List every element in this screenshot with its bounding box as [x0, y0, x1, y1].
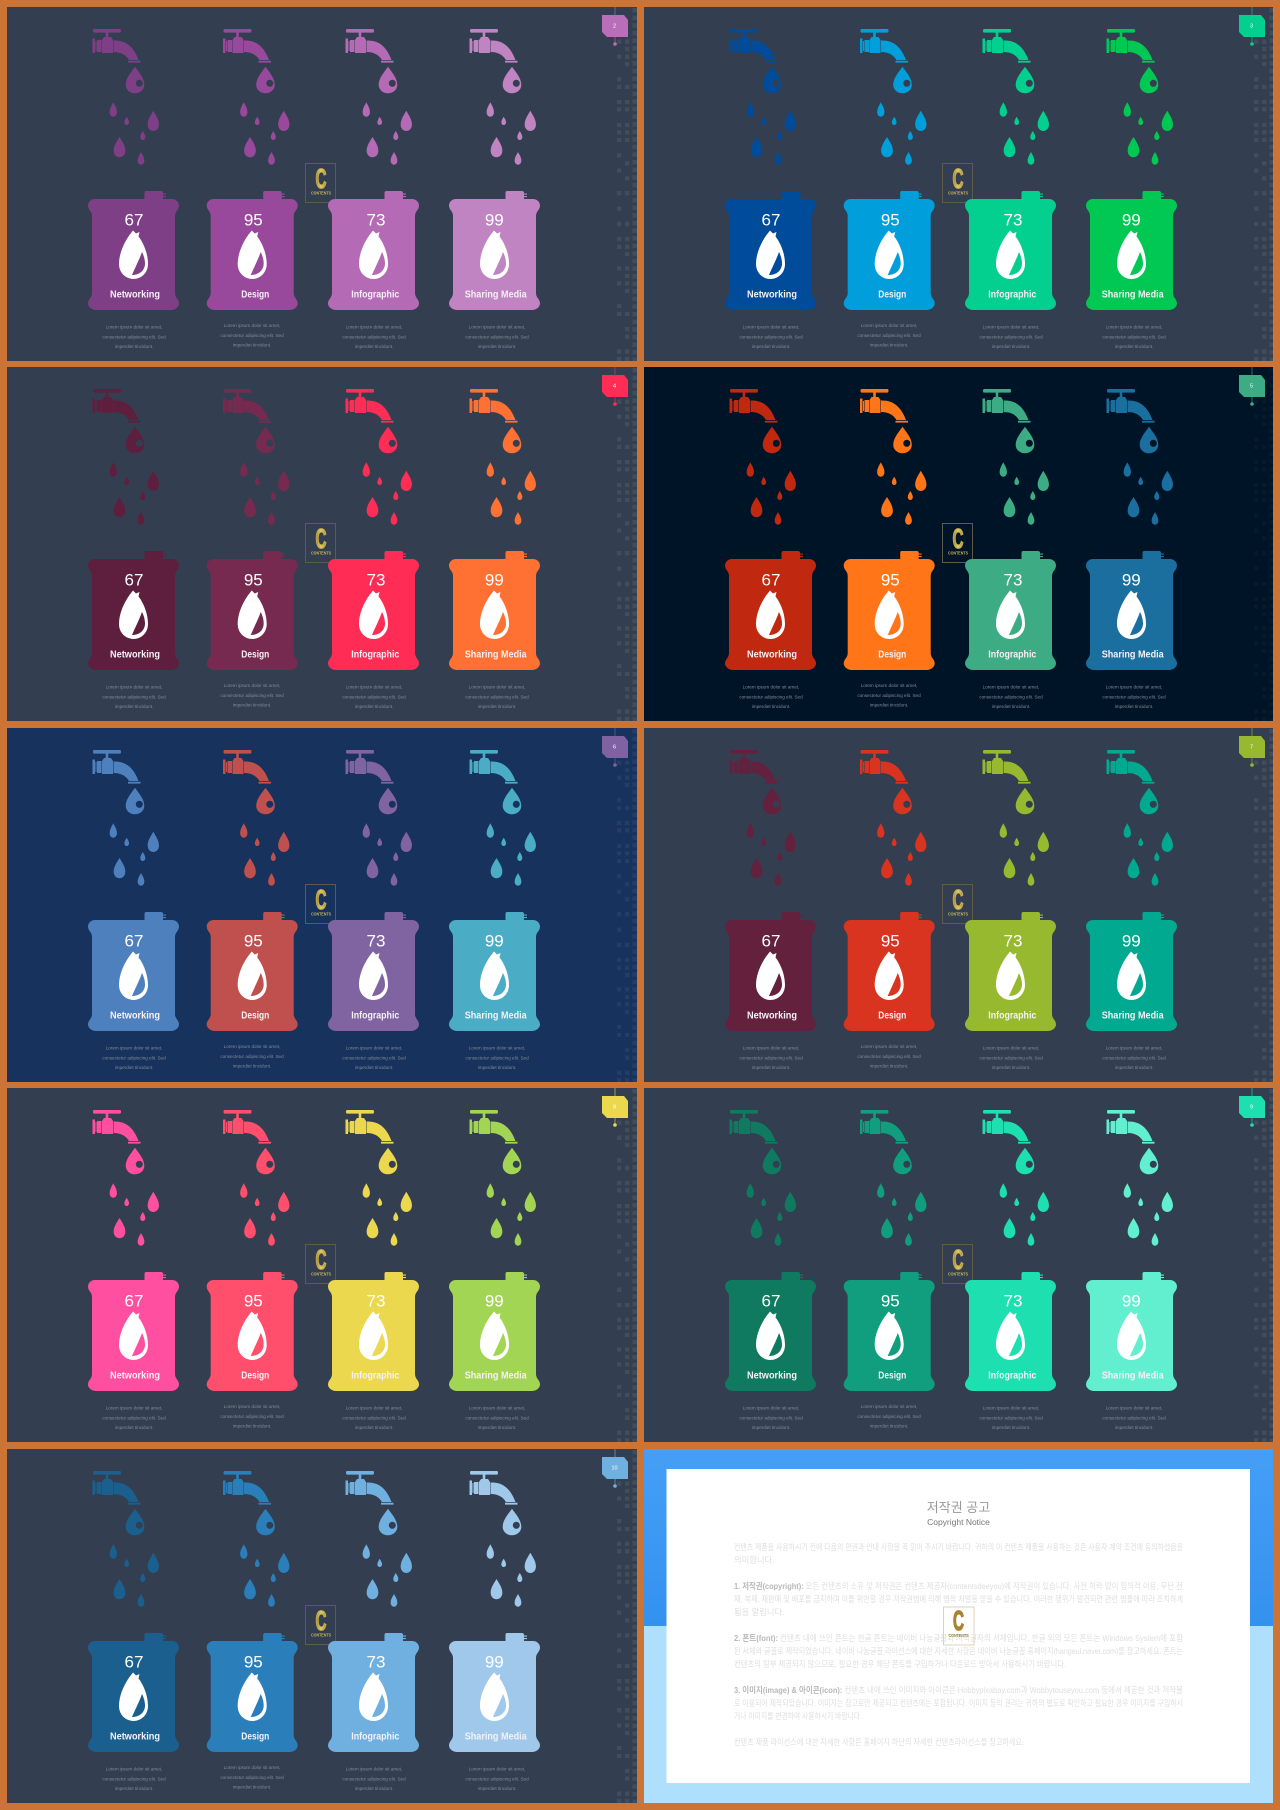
logo: CONTENTS [311, 190, 331, 196]
column: Design: Lorem ipsum dolor sit amet, [224, 683, 280, 688]
column: Sharing Media: Sharing Media [465, 1731, 527, 1743]
column: Sharing Media: Sharing Media [1102, 649, 1164, 661]
column: Design: imperdiet tincidunt. [233, 702, 271, 708]
page tag 7 [1239, 728, 1265, 767]
column: Design: consectetur adipiscing elit. Sed [857, 693, 921, 698]
column: Infographic: Lorem ipsum dolor sit amet, [346, 324, 402, 329]
column: Networking: consectetur adipiscing elit. Sed [739, 694, 803, 699]
column: Sharing Media: imperdiet tincidunt. [478, 1425, 516, 1430]
panel: copyright notice [644, 1449, 1273, 1803]
notice body text: 컨텐츠의 일부 제공되지 않으므로, 필요한 경우 해당 폰트를 구입하거나 다운로드 받아서 사용하시기 바랍니다. [734, 1659, 1066, 1669]
logo [306, 1244, 336, 1284]
column: Networking: Lorem ipsum dolor sit amet, [106, 324, 162, 329]
column: Infographic: 73 [367, 1291, 385, 1310]
column: Design: 95 [244, 931, 263, 950]
column: Infographic [965, 29, 1056, 349]
column: Design: consectetur adipiscing elit. Sed [220, 1054, 284, 1059]
column: Design: Design [241, 1010, 269, 1022]
panel: slide 9 teal [644, 1088, 1273, 1442]
column: Design: imperdiet tincidunt. [233, 1064, 271, 1068]
page tag 6: 6 [613, 744, 616, 750]
column: Infographic: 73 [1004, 570, 1022, 589]
column: Networking: Lorem ipsum dolor sit amet, [106, 1045, 162, 1050]
column: Infographic: Infographic [988, 1010, 1036, 1022]
column: Infographic: 73 [1004, 931, 1022, 950]
column: Design: Lorem ipsum dolor sit amet, [861, 323, 917, 328]
column: Infographic: imperdiet tincidunt. [992, 704, 1030, 709]
column: Design: Lorem ipsum dolor sit amet, [224, 1044, 280, 1049]
column: Networking: Networking [747, 1010, 797, 1022]
column: Networking: 67 [762, 1291, 780, 1310]
column: Design: Design [878, 649, 906, 661]
column: Sharing Media: imperdiet tincidunt. [1115, 344, 1153, 349]
panel: slide 3 blue green [644, 7, 1273, 361]
column: Infographic: Lorem ipsum dolor sit amet, [983, 684, 1039, 689]
column: Sharing Media: 99 [485, 210, 504, 229]
column: Design: consectetur adipiscing elit. Sed [857, 1054, 921, 1059]
column: Networking: 67 [762, 931, 780, 950]
column: Networking [725, 750, 816, 1070]
notice body text: 3. 이미지(image) & 아이콘(icon): 컨텐츠 내에 쓰인 이미지와 아이콘은 Hobbypixabay.com과 Wobbytouseyou.com 등에서 제공한 것과 저작물 [734, 1685, 1183, 1695]
column: Sharing Media: Lorem ipsum dolor sit amet, [1106, 1405, 1162, 1410]
column: Networking [88, 750, 179, 1070]
column: Sharing Media: consectetur adipiscing elit. Sed [465, 334, 529, 339]
logo: CONTENTS [948, 550, 968, 556]
logo: C [316, 163, 326, 194]
column: Design: 95 [881, 1291, 900, 1310]
notice body text: 2. 폰트(font): 컨텐츠 내에 쓰인 폰트는 한글 폰트는 네이버 나눔글꼴과 저작권자의 서체입니다. 한글 외의 모든 폰트는 Windows System에 포함 [734, 1633, 1183, 1643]
column: Networking [88, 1110, 179, 1430]
column: Infographic: consectetur adipiscing elit. Sed [342, 334, 406, 339]
column: Infographic: Lorem ipsum dolor sit amet, [346, 1045, 402, 1050]
column: Infographic: 73 [1004, 210, 1022, 229]
column: Design: Lorem ipsum dolor sit amet, [861, 683, 917, 688]
column: Design: Design [241, 649, 269, 661]
column: Sharing Media: consectetur adipiscing elit. Sed [465, 1776, 529, 1781]
page tag 10: 10 [611, 1466, 618, 1472]
column: Sharing Media [449, 750, 540, 1070]
column: Design [844, 1110, 935, 1428]
column: Infographic [328, 1471, 419, 1791]
column: Infographic: imperdiet tincidunt. [992, 1425, 1030, 1430]
column: Infographic: Infographic [351, 1731, 399, 1743]
column: Infographic: 73 [1004, 1291, 1022, 1310]
page tag 3 [1239, 7, 1265, 46]
column: Networking: Networking [110, 649, 160, 661]
column: Sharing Media: Lorem ipsum dolor sit amet, [469, 1045, 525, 1050]
column: Networking: imperdiet tincidunt. [752, 1425, 790, 1430]
column: Networking: Networking [747, 289, 797, 301]
column: Networking: 67 [125, 210, 143, 229]
column: Networking: Networking [110, 1731, 160, 1743]
column: Infographic [965, 750, 1056, 1070]
notice body text: 된 서체와 글꼴로 제작되었습니다. 네이버 나눔글꼴 라이선스에 대한 자세한 사항은 네이버 나눔글꼴 홈페이지(hangeul.naver.com)를 참고하세요. 폰트는 [734, 1646, 1183, 1656]
column: Networking: imperdiet tincidunt. [752, 1065, 790, 1070]
logo [306, 884, 336, 924]
column: Design: imperdiet tincidunt. [233, 342, 271, 348]
page tag 9: 9 [1250, 1104, 1253, 1110]
page tag 8: 8 [613, 1104, 616, 1110]
column: Sharing Media: Lorem ipsum dolor sit amet, [469, 1766, 525, 1771]
logo [306, 523, 336, 562]
notice body text: 됨을 알립니다. [734, 1607, 784, 1617]
column: Networking: Networking [110, 1010, 160, 1022]
column: Infographic: Infographic [351, 649, 399, 661]
page tag 9 [1239, 1088, 1265, 1127]
column: Design: consectetur adipiscing elit. Sed [220, 693, 284, 698]
column: Networking: consectetur adipiscing elit. Sed [102, 1776, 166, 1781]
column: Networking: consectetur adipiscing elit. Sed [102, 334, 166, 339]
logo: C [316, 884, 326, 915]
column: Sharing Media [1086, 1110, 1177, 1430]
panel: slide 5 dark navy [644, 367, 1273, 721]
column: Networking [725, 389, 816, 709]
column: Design: Lorem ipsum dolor sit amet, [224, 323, 280, 328]
column: Sharing Media: Sharing Media [465, 289, 527, 301]
column: Networking: consectetur adipiscing elit. Sed [102, 1055, 166, 1060]
column: Sharing Media: 99 [485, 570, 504, 589]
column: Sharing Media: 99 [1122, 1291, 1141, 1310]
notice sheet [666, 1469, 1250, 1783]
column: Design [207, 1471, 298, 1790]
column: Infographic: imperdiet tincidunt. [355, 1425, 393, 1430]
column: Networking: Lorem ipsum dolor sit amet, [743, 684, 799, 689]
column: Infographic: Lorem ipsum dolor sit amet, [346, 684, 402, 689]
logo: CONTENTS [948, 912, 968, 916]
column: Infographic: consectetur adipiscing elit. Sed [979, 1415, 1043, 1420]
column: Networking: Networking [110, 1370, 160, 1382]
logo [942, 163, 972, 202]
column: Sharing Media: imperdiet tincidunt. [1115, 1425, 1153, 1430]
column: Design: consectetur adipiscing elit. Sed [857, 1414, 921, 1419]
column: Infographic [965, 1110, 1056, 1430]
column: Infographic: imperdiet tincidunt. [355, 1065, 393, 1070]
column: Sharing Media: consectetur adipiscing elit. Sed [465, 1055, 529, 1060]
column: Sharing Media: imperdiet tincidunt. [1115, 704, 1153, 709]
column: Sharing Media: Sharing Media [465, 649, 527, 661]
column: Infographic: consectetur adipiscing elit. Sed [342, 1415, 406, 1420]
column: Design [207, 389, 298, 708]
column: Design: imperdiet tincidunt. [870, 1064, 908, 1068]
column: Networking: Lorem ipsum dolor sit amet, [743, 1045, 799, 1050]
column: Networking [88, 29, 179, 349]
column: Networking: Networking [747, 649, 797, 661]
notice body text: 의미합니다. [734, 1555, 774, 1565]
column: Networking: imperdiet tincidunt. [752, 704, 790, 709]
column: Design [844, 389, 935, 708]
page tag 7: 7 [1250, 744, 1253, 750]
column: Sharing Media [1086, 389, 1177, 709]
column: Infographic [328, 1110, 419, 1430]
column: Design: imperdiet tincidunt. [870, 342, 908, 348]
heading: Korean title: 저작권 공고 [927, 1500, 990, 1515]
logo: C [316, 1244, 326, 1275]
column: Networking: Lorem ipsum dolor sit amet, [743, 1405, 799, 1410]
panel: slide 4 maroon red [7, 367, 637, 721]
column: Networking: imperdiet tincidunt. [115, 1786, 153, 1791]
notice body text: 컨텐츠 제품을 사용하시기 전에 다음의 판권과 안내 사항을 꼭 읽어 주시기 바랍니다. 귀하의 이 컨텐츠 제품을 사용하는 것은 사용자 계약 조건에 동의하셨음을 [734, 1542, 1183, 1552]
column: Design: Design [241, 1370, 269, 1382]
column: Infographic: Lorem ipsum dolor sit amet, [983, 1405, 1039, 1410]
logo [944, 1605, 974, 1645]
column: Sharing Media [449, 1110, 540, 1430]
column: Design: Design [241, 1731, 269, 1743]
column: Networking: Lorem ipsum dolor sit amet, [106, 1766, 162, 1771]
column: Design: consectetur adipiscing elit. Sed [857, 333, 921, 338]
column: Infographic: imperdiet tincidunt. [992, 344, 1030, 349]
column: Infographic [328, 29, 419, 349]
column: Infographic: consectetur adipiscing elit. Sed [342, 1055, 406, 1060]
logo: C [953, 1605, 964, 1636]
column: Design: imperdiet tincidunt. [870, 1424, 908, 1428]
column: Networking [725, 29, 816, 349]
logo: C [952, 884, 964, 915]
column: Infographic: 73 [367, 570, 385, 589]
column: Networking: consectetur adipiscing elit. Sed [739, 334, 803, 339]
column: Infographic: Infographic [351, 289, 399, 301]
panel: slide 10 sky blue [7, 1449, 637, 1803]
column: Sharing Media: Lorem ipsum dolor sit amet, [1106, 1045, 1162, 1050]
notice body text: 거나 이미지를 변경하여 사용하시기 바랍니다. [734, 1711, 862, 1721]
column: Design [207, 750, 298, 1068]
column: Networking [725, 1110, 816, 1430]
column: Sharing Media: imperdiet tincidunt. [478, 704, 516, 709]
page tag 3: 3 [1250, 24, 1253, 30]
column: Infographic: 73 [367, 931, 385, 950]
column: Infographic: imperdiet tincidunt. [355, 344, 393, 349]
column: Sharing Media: consectetur adipiscing elit. Sed [465, 694, 529, 699]
page tag 5 [1239, 367, 1265, 406]
column: Design: imperdiet tincidunt. [233, 1424, 271, 1428]
column: Sharing Media [449, 29, 540, 349]
column: Sharing Media: 99 [485, 1652, 504, 1671]
column: Networking: 67 [125, 1652, 143, 1671]
column: Networking: Networking [747, 1370, 797, 1382]
column: Design: Design [878, 1370, 906, 1382]
column: Infographic: Infographic [988, 1370, 1036, 1382]
column: Sharing Media: Sharing Media [1102, 1010, 1164, 1022]
column: Design: 95 [881, 931, 900, 950]
notice body text: 재, 복제, 재판매 및 배포를 금지하며 이를 위반할 경우 저작권법에 의해 법적 처벌을 받을 수 있습니다. 이러한 행위가 발견되면 관련 법률에 따라 조치하게 [734, 1594, 1183, 1604]
column: Sharing Media: Lorem ipsum dolor sit amet, [469, 1405, 525, 1410]
notice body text: 로 이용되어 제작되었습니다. 이미지는 참고로만 제공되고 컨텐츠에는 포함됩니다. 이미지 등의 권리는 귀하의 별도로 확인하고 필요한 경우 이미지를 구입하시 [734, 1698, 1183, 1708]
column: Sharing Media: 99 [1122, 570, 1141, 589]
page tag 5: 5 [1250, 384, 1253, 390]
column: Sharing Media: consectetur adipiscing elit. Sed [1102, 1415, 1166, 1420]
panel: slide 6 navy blue [7, 728, 637, 1082]
column: Networking: 67 [762, 210, 780, 229]
column: Networking: Networking [110, 289, 160, 301]
column: Infographic: Infographic [351, 1370, 399, 1382]
column: Networking: Lorem ipsum dolor sit amet, [106, 684, 162, 689]
page tag 4 [602, 367, 628, 406]
notice body text: 컨텐츠 제품 라이선스에 대한 자세한 사항은 홈페이지 하단의 자세한 컨텐츠라이선스를 참고하세요. [734, 1737, 1024, 1747]
column: Networking: consectetur adipiscing elit. Sed [102, 694, 166, 699]
logo: CONTENTS [948, 1272, 968, 1276]
column: Infographic: consectetur adipiscing elit. Sed [979, 694, 1043, 699]
column: Networking: consectetur adipiscing elit. Sed [739, 1415, 803, 1420]
column: Sharing Media: imperdiet tincidunt. [1115, 1065, 1153, 1070]
column: Infographic: Lorem ipsum dolor sit amet, [983, 1045, 1039, 1050]
column: Design: Design [878, 1010, 906, 1022]
page tag 2 [602, 7, 628, 46]
column: Infographic: imperdiet tincidunt. [355, 1786, 393, 1791]
column: Sharing Media: Lorem ipsum dolor sit amet, [469, 324, 525, 329]
column: Sharing Media [449, 389, 540, 709]
column: Networking [88, 389, 179, 709]
column: Networking: 67 [125, 570, 143, 589]
column: Sharing Media: imperdiet tincidunt. [478, 344, 516, 349]
column: Infographic: Infographic [988, 289, 1036, 301]
column: Design: imperdiet tincidunt. [870, 702, 908, 708]
page tag 10 [602, 1449, 628, 1488]
column: Infographic: consectetur adipiscing elit. Sed [979, 334, 1043, 339]
logo: CONTENTS [311, 912, 331, 916]
column: Design: 95 [244, 210, 263, 229]
logo: CONTENTS [948, 190, 968, 196]
column: Sharing Media: Lorem ipsum dolor sit amet, [469, 684, 525, 689]
column: Infographic [328, 750, 419, 1070]
column: Sharing Media [449, 1471, 540, 1791]
column: Infographic [965, 389, 1056, 709]
column: Infographic: Infographic [988, 649, 1036, 661]
column: Sharing Media: consectetur adipiscing elit. Sed [1102, 334, 1166, 339]
column: Sharing Media: Lorem ipsum dolor sit amet, [1106, 324, 1162, 329]
column: Design: Lorem ipsum dolor sit amet, [224, 1404, 280, 1409]
logo: C [316, 1605, 326, 1636]
column: Sharing Media: consectetur adipiscing elit. Sed [465, 1415, 529, 1420]
column: Design: 95 [244, 570, 263, 589]
column: Design: 95 [881, 570, 900, 589]
logo: C [952, 523, 964, 554]
logo [942, 884, 972, 924]
column: Design: Design [241, 289, 269, 301]
column: Sharing Media: 99 [1122, 210, 1141, 229]
column: Design [207, 1110, 298, 1428]
logo [942, 1244, 972, 1284]
logo: C [952, 163, 964, 194]
column: Design: consectetur adipiscing elit. Sed [220, 1414, 284, 1419]
column: Infographic: imperdiet tincidunt. [355, 704, 393, 709]
column: Networking: imperdiet tincidunt. [115, 344, 153, 349]
column: Sharing Media: 99 [1122, 931, 1141, 950]
column: Sharing Media [1086, 750, 1177, 1070]
logo: CONTENTS [311, 1272, 331, 1276]
column: Infographic: consectetur adipiscing elit. Sed [342, 1776, 406, 1781]
column: Networking: 67 [125, 1291, 143, 1310]
column: Sharing Media: Sharing Media [465, 1010, 527, 1022]
column: Design: consectetur adipiscing elit. Sed [220, 1775, 284, 1780]
column: Design: Design [878, 289, 906, 301]
page tag 2: 2 [613, 24, 616, 30]
column: Networking: imperdiet tincidunt. [752, 344, 790, 349]
column: Networking: Lorem ipsum dolor sit amet, [743, 324, 799, 329]
column: Infographic: Lorem ipsum dolor sit amet, [346, 1405, 402, 1410]
column: Infographic: consectetur adipiscing elit. Sed [342, 694, 406, 699]
column: Sharing Media: 99 [485, 1291, 504, 1310]
logo [306, 163, 336, 202]
column: Sharing Media: imperdiet tincidunt. [478, 1786, 516, 1791]
page tag 8 [602, 1088, 628, 1127]
column: Infographic: imperdiet tincidunt. [992, 1065, 1030, 1070]
panel: slide 8 pink yellow [7, 1088, 637, 1442]
logo: C [316, 523, 326, 554]
column: Sharing Media: 99 [485, 931, 504, 950]
column: Infographic: Lorem ipsum dolor sit amet, [346, 1766, 402, 1771]
column: Sharing Media [1086, 29, 1177, 349]
column: Networking: Lorem ipsum dolor sit amet, [106, 1405, 162, 1410]
column: Networking: imperdiet tincidunt. [115, 1425, 153, 1430]
panel: slide 2 purple [7, 7, 637, 361]
column: Design: 95 [244, 1652, 263, 1671]
column: Design: Lorem ipsum dolor sit amet, [861, 1044, 917, 1049]
column: Infographic: consectetur adipiscing elit. Sed [979, 1055, 1043, 1060]
logo: C [952, 1244, 964, 1275]
page tag 4: 4 [613, 384, 616, 390]
column: Design: 95 [881, 210, 900, 229]
column: Design [844, 29, 935, 348]
page tag 6 [602, 728, 628, 767]
column: Design: imperdiet tincidunt. [233, 1784, 271, 1790]
column: Infographic [328, 389, 419, 709]
column: Infographic: 73 [367, 210, 385, 229]
column: Sharing Media: Sharing Media [465, 1370, 527, 1382]
column: Design: 95 [244, 1291, 263, 1310]
logo: CONTENTS [311, 1632, 331, 1638]
column: Networking: imperdiet tincidunt. [115, 1065, 153, 1070]
column: Design [844, 750, 935, 1068]
column: Design [207, 29, 298, 348]
column: Infographic: 73 [367, 1652, 385, 1671]
column: Sharing Media: Sharing Media [1102, 289, 1164, 301]
column: Sharing Media: imperdiet tincidunt. [478, 1065, 516, 1070]
panel: slide 7 red lime teal [644, 728, 1273, 1082]
heading: Copyright Notice: Copyright Notice [927, 1517, 990, 1527]
column: Networking: 67 [762, 570, 780, 589]
logo: CONTENTS [311, 550, 331, 556]
column: Networking: imperdiet tincidunt. [115, 704, 153, 709]
column: Sharing Media: Lorem ipsum dolor sit amet, [1106, 684, 1162, 689]
column: Sharing Media: consectetur adipiscing elit. Sed [1102, 1055, 1166, 1060]
column: Design: Lorem ipsum dolor sit amet, [224, 1765, 280, 1770]
logo [942, 523, 972, 562]
column: Networking [88, 1471, 179, 1791]
column: Networking: consectetur adipiscing elit. Sed [102, 1415, 166, 1420]
notice body text [734, 1542, 1183, 1747]
column: Design: consectetur adipiscing elit. Sed [220, 333, 284, 338]
column: Design: Lorem ipsum dolor sit amet, [861, 1404, 917, 1409]
column: Networking: 67 [125, 931, 143, 950]
logo: CONTENTS [948, 1633, 969, 1638]
column: Infographic: Lorem ipsum dolor sit amet, [983, 324, 1039, 329]
column: Sharing Media: consectetur adipiscing elit. Sed [1102, 694, 1166, 699]
column: Infographic: Infographic [351, 1010, 399, 1022]
column: Sharing Media: Sharing Media [1102, 1370, 1164, 1382]
column: Networking: consectetur adipiscing elit. Sed [739, 1055, 803, 1060]
logo [306, 1605, 336, 1644]
notice body text: 1. 저작권(copyright): 모든 컨텐츠의 소유 및 저작권은 컨텐츠 제공자(contentsdeeyou)에 저작권이 있습니다. 사전 허락 없이 임의적 이용, 무단 전 [734, 1581, 1183, 1591]
